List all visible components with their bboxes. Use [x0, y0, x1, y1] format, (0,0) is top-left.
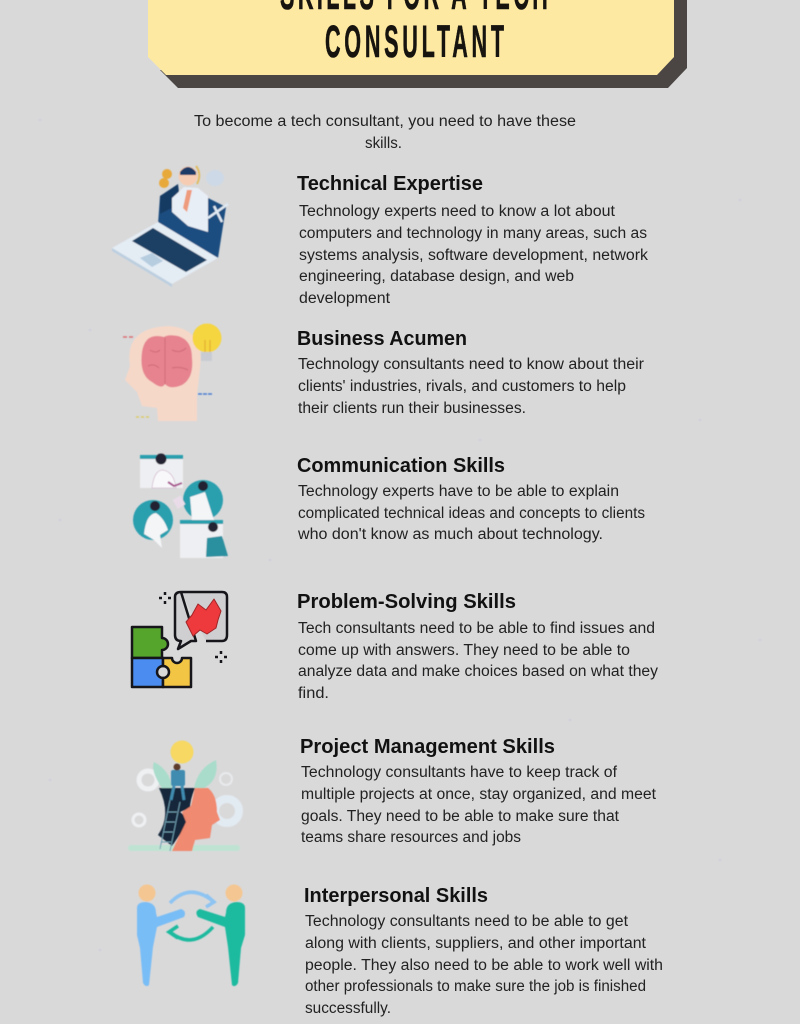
intro text: To become a tech consultant, you need to have these: [194, 113, 576, 130]
intro text: [194, 113, 576, 152]
text: Problem-Solving Skills: analyze data and make choices based on what they: [298, 663, 658, 680]
text: Problem-Solving Skills: [298, 620, 658, 702]
intro text: skills.: [365, 135, 402, 152]
text: Problem-Solving Skills: come up with answers. They need to be able to: [298, 642, 630, 659]
text: Business Acumen: their clients run their businesses.: [298, 400, 526, 417]
heading: Problem-Solving Skills: Problem-Solving Skills: [297, 591, 516, 613]
text: Technical Expertise: systems analysis, software development, network: [299, 247, 648, 264]
text: Business Acumen: clients' industries, rivals, and customers to help: [298, 378, 626, 395]
text: Communication Skills: [297, 483, 645, 543]
text: Communication Skills: Technology experts have to be able to explain: [298, 483, 619, 500]
text: Project Management Skills: multiple projects at once, stay organized, and meet: [301, 786, 657, 803]
icon: brain and light bulb: [123, 324, 222, 421]
icon: project head with ladder: [128, 740, 240, 851]
text: Interpersonal Skills: along with clients, suppliers, and other important: [305, 935, 647, 952]
text: Interpersonal Skills: successfully.: [305, 1000, 391, 1017]
text: Business Acumen: [298, 356, 644, 417]
text: Interpersonal Skills: people. They also need to be able to work well with: [305, 957, 663, 974]
title banner: [148, 0, 687, 88]
banner shadow: [160, 0, 687, 88]
icon: people communicating: [133, 454, 228, 558]
text: Technical Expertise: Technology experts need to know a lot about: [299, 203, 616, 220]
heading: Project Management Skills: Project Management Skills: [300, 736, 555, 758]
text: Technical Expertise: [299, 203, 648, 307]
icon: puzzle pieces: [132, 592, 227, 687]
text: Business Acumen: Technology consultants need to know about their: [298, 356, 644, 373]
text: Project Management Skills: goals. They need to be able to make sure that: [301, 808, 620, 825]
text: Technical Expertise: development: [299, 290, 391, 307]
text: Project Management Skills: [301, 764, 657, 846]
text: Interpersonal Skills: [305, 913, 663, 1017]
banner panel: [148, 0, 674, 75]
title: [280, 0, 548, 67]
text: Problem-Solving Skills: Tech consultants need to be able to find issues and: [298, 620, 655, 637]
text: Communication Skills: complicated technical ideas and concepts to clients: [298, 505, 645, 522]
text: Interpersonal Skills: other professionals to make sure the job is finished: [305, 978, 646, 995]
text: Technical Expertise: engineering, database design, and web: [299, 268, 574, 285]
heading: Interpersonal Skills: Interpersonal Skills: [304, 885, 488, 907]
heading: Business Acumen: Business Acumen: [297, 328, 467, 350]
heading: Technical Expertise: Technical Expertise: [297, 173, 483, 195]
icon: consultant on laptop: [112, 166, 228, 287]
text: Technical Expertise: computers and technology in many areas, such as: [299, 225, 647, 242]
title: CONSULTANT: [325, 17, 504, 67]
icon: two people exchanging: [137, 884, 245, 986]
heading: Communication Skills: Communication Skills: [297, 455, 505, 477]
text: Communication Skills: who don't know as much about technology.: [297, 526, 603, 543]
text: Interpersonal Skills: Technology consultants need to be able to get: [305, 913, 629, 930]
text: Project Management Skills: teams share resources and jobs: [301, 829, 521, 846]
text: Problem-Solving Skills: find.: [298, 685, 329, 702]
text: Project Management Skills: Technology consultants have to keep track of: [301, 764, 618, 781]
